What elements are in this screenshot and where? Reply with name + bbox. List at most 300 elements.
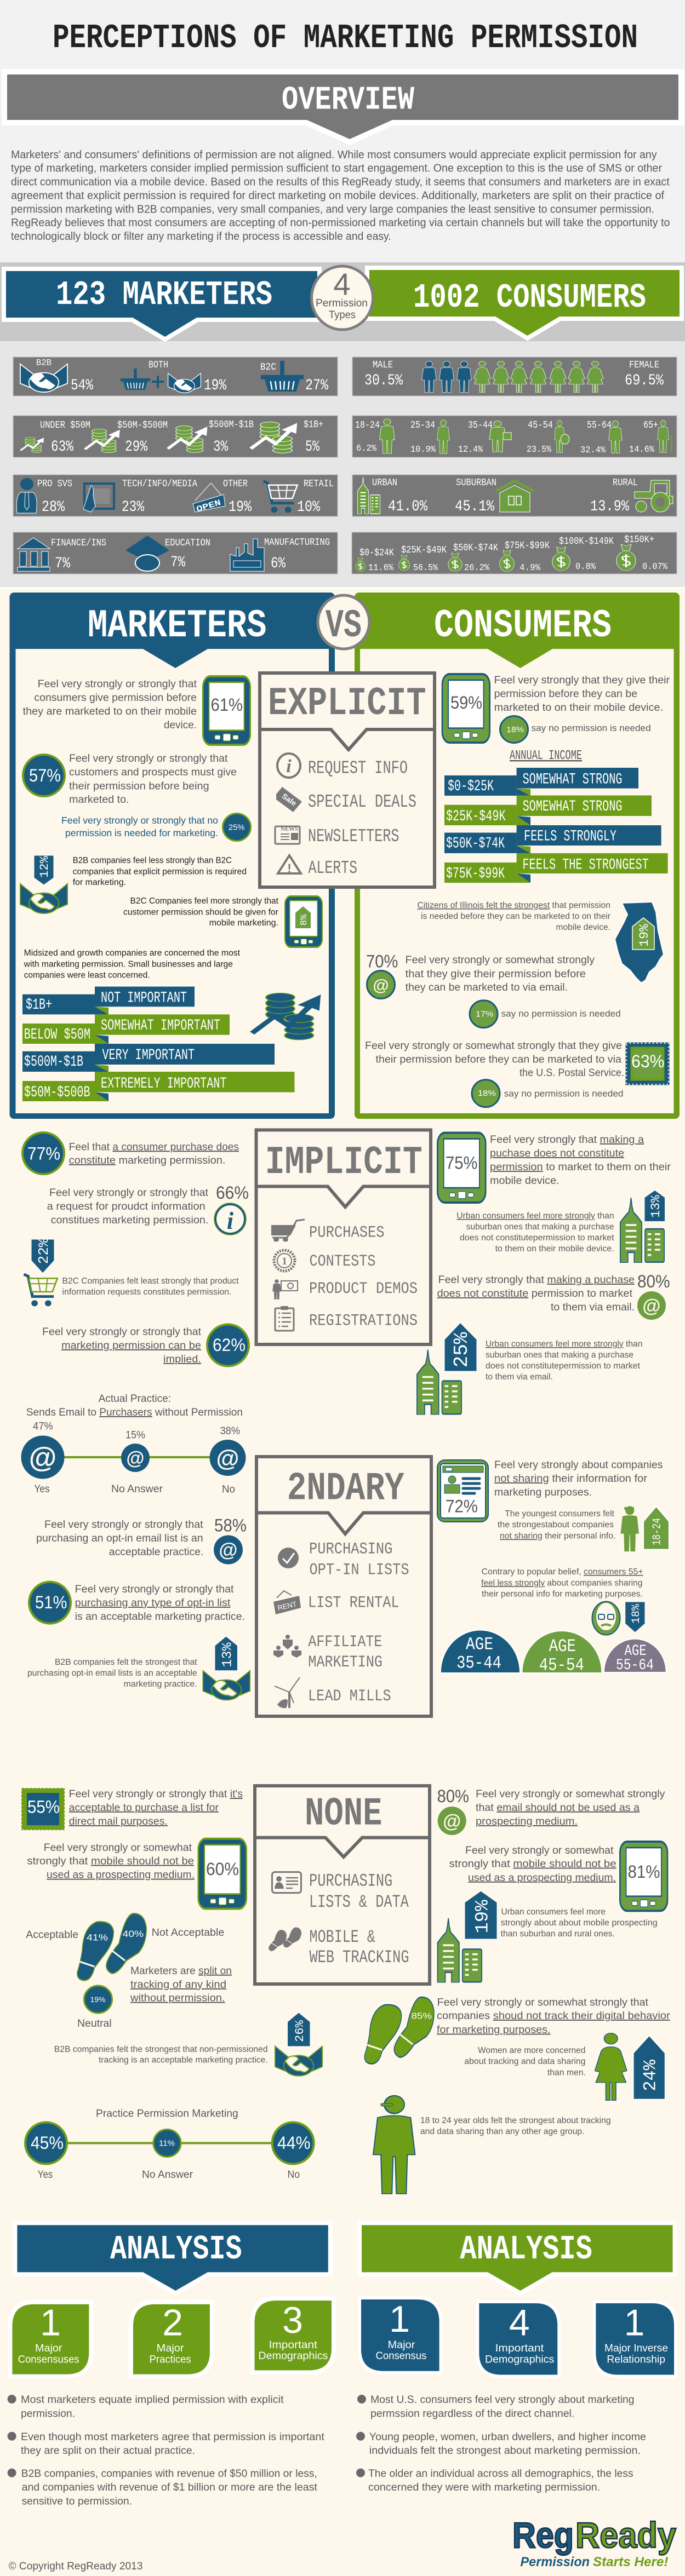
icon: postage stamp 55%: 55%: [27, 1797, 60, 1817]
marketers explicit: B2C note: mobile marketing.: [209, 918, 278, 928]
marketers implicit: B2C note: B2C Companies felt least strongly that product: [62, 1277, 239, 1286]
panel: explicit permission: [260, 673, 435, 887]
marketers none: split note: tracking of any kind: [130, 1979, 226, 1991]
stat: 57%: 57%: [29, 766, 61, 785]
stat: no answer 15%: 15%: [125, 1429, 145, 1441]
stat: yes 47%: @: [29, 1442, 56, 1474]
consumers none: tracking text: for marketing purposes.: [437, 2025, 550, 2036]
consumers implicit: mobile purchase text: mobile device.: [490, 1175, 560, 1187]
marketers implicit: product info text: constitues marketing permission.: [51, 1215, 208, 1226]
marketers explicit: mobile permission text: device.: [164, 720, 197, 731]
stat: age 18-24: [355, 419, 395, 454]
consumers none: mobile prospecting text: Feel very strongly or somewhat: [465, 1845, 614, 1856]
ribbon: below $50M somewhat important: BELOW $50M: [24, 1026, 90, 1044]
stat: education 7%: 7%: [170, 554, 185, 571]
marketers explicit: B2B note: companies that explicit permission is required: [73, 867, 247, 876]
marketers none: direct mail text: Feel very strongly or strongly that it's: [69, 1789, 243, 1800]
logo: RegReady: Permission: [521, 2555, 590, 2569]
marketers none: mobile prospecting text: [27, 1842, 195, 1881]
consumers explicit: Illinois note: mobile device.: [556, 923, 610, 932]
card: 1 major consensus: Consensus: [376, 2350, 426, 2362]
stat: no answer 11%: 11%: [159, 2139, 175, 2148]
stat: $150K+ 0.07%: [616, 534, 668, 572]
item: purchasing lists and data: LISTS & DATA: [309, 1892, 409, 1912]
marketers explicit: customers text: Feel very strongly or strongly that: [69, 753, 228, 764]
consumers 2ndary: not sharing text: marketing purposes.: [494, 1487, 592, 1498]
ribbon: $0-$25K somewhat strong: SOMEWHAT STRONG: [523, 771, 623, 789]
consumers implicit: mobile purchase text: puchase does not constitute: [490, 1148, 624, 1159]
chart: practice permission marketing: Practice Permission Marketing: [96, 2108, 238, 2120]
stat: $500M-$1B 3%: $500M-$1B: [209, 419, 254, 430]
ribbon: $0-$25K somewhat strong: $0-$25K: [448, 778, 494, 795]
stat: 51%: 51%: [35, 1592, 67, 1612]
marketers none: split note: without permission.: [130, 1993, 225, 2004]
badge: 4 permission types: 4: [333, 267, 351, 301]
consumers none: women note: about tracking and data sharing: [464, 2057, 585, 2066]
marketers 2ndary: any opt-in text: Feel very strongly or strongly that: [75, 1584, 234, 1595]
logo: RegReady: Starts Here!: [593, 2555, 669, 2569]
card: 1 major consensuses: Consensuses: [18, 2354, 79, 2366]
card: 1 major consensus: 1: [389, 2298, 410, 2340]
icon: phone 75%: [437, 1132, 486, 1203]
stat: retail 10%: [264, 479, 334, 516]
marketers none: B2B note: [54, 2045, 268, 2065]
stat: no 38%: @: [216, 1445, 239, 1471]
icon: phone 59%: [442, 674, 490, 743]
card: 3 important demographics: [254, 2299, 332, 2370]
consumers none: women note: [464, 2046, 586, 2077]
analysis banner: marketers: ANALYSIS: [110, 2230, 242, 2269]
stat: suburban 45.1%: SUBURBAN: [456, 478, 496, 488]
item: contests: 1: [282, 1256, 287, 1267]
marketers implicit: purchase text: Feel that a consumer purchase does: [69, 1141, 239, 1153]
item: purchasing lists and data: PURCHASING: [309, 1871, 392, 1891]
panel: implicit permission: [256, 1130, 431, 1344]
icon: older face with 18% tag: 18%: [630, 1603, 643, 1624]
consumers implicit: mobile purchase text: permission to market to them on their: [490, 1162, 671, 1173]
marketers none: B2B note: B2B companies felt the strongest that non-permissioned: [54, 2045, 268, 2054]
ribbon: $1B+ not important: $1B+: [26, 997, 52, 1014]
marketers implicit: product info text: Feel very strongly or strongly that: [49, 1187, 209, 1199]
ribbon: $50M-$500B extremely important: $50M-$500B: [24, 1084, 90, 1101]
heading: implicit: IMPLICIT: [265, 1140, 423, 1185]
chart: tracking footprints: 19%: [90, 1995, 105, 2004]
marketers none: split note: Marketers are split on: [130, 1965, 232, 1977]
stat: 57%: [23, 755, 65, 796]
consumers implicit: email purchase text: [437, 1274, 635, 1313]
stat: rural 13.9%: RURAL: [613, 478, 638, 488]
icon: handshake with 13% tag: 13%: [220, 1642, 236, 1668]
card: 2 major practices: Practices: [150, 2354, 191, 2366]
marketers 2ndary: opt-in email text: [36, 1519, 203, 1558]
item: alerts: ALERTS: [308, 858, 357, 878]
chart: actual practice, email to purchasers: Sends Email to Purchasers without Permission: [26, 1407, 243, 1418]
marketers none: direct mail text: acceptable to purchase a list for: [69, 1802, 219, 1814]
overview text: [11, 148, 670, 243]
stat: age 45-54: 23.5%: [527, 445, 552, 455]
item: affiliate marketing: AFFILIATE: [308, 1633, 382, 1652]
overview text: agreement that explicit permission is required for direct marketing on mobile devices. Additionally, marketers are split on their practice of: [11, 189, 664, 202]
analysis list: marketers: [8, 2394, 325, 2508]
marketers implicit: product info text: a request for proudct information: [47, 1201, 206, 1212]
stat: age 45-54: 45-54: [528, 420, 553, 431]
stat: 17% say no permission needed: [470, 1001, 621, 1028]
heading: 2ndary: 2NDARY: [287, 1467, 404, 1511]
icon: phone with 8% tag: 8%: [299, 914, 310, 925]
item: lead mills: [275, 1677, 391, 1708]
item: purchases: PURCHASES: [309, 1223, 385, 1242]
item: list rental: LIST RENTAL: [308, 1594, 399, 1613]
stat: rural 13.9%: [590, 478, 673, 515]
stat: finance 7%: FINANCE/INS: [51, 538, 106, 549]
analysis list: marketers: B2B companies, companies with revenue of $50 million or less,: [21, 2468, 317, 2480]
stat: both 19%: 19%: [204, 377, 226, 394]
marketers explicit: company size note: [24, 948, 241, 980]
marketers implicit: B2C note: information requests constitutes permission.: [62, 1287, 231, 1297]
stat: suburban 45.1%: 45.1%: [455, 498, 494, 515]
badge: 4 permission types: Permission: [316, 298, 368, 309]
panel: annual income: [352, 532, 677, 574]
chart: tracking footprints: Acceptable: [26, 1929, 78, 1941]
ribbon: $75K-$99K feels the strongest: [444, 853, 668, 883]
consumers implicit: urban email note: does not constitutepermission to market: [486, 1361, 641, 1371]
consumers explicit: Illinois note: [417, 901, 610, 932]
stat: male 30.5%: 30.5%: [364, 372, 403, 389]
stat: age 25-34: 10.9%: [410, 445, 436, 455]
stat: age 18-24: 18-24: [355, 420, 380, 431]
stat: $25K-$49K 56.5%: $25K-$49K: [401, 545, 447, 556]
marketers 2ndary: B2B note: B2B companies felt the strongest that: [55, 1658, 197, 1667]
stat: finance 7%: [18, 538, 106, 572]
stat: age 65+: 65+: [643, 420, 658, 431]
marketers implicit: implied text: Feel very strongly or strongly that: [42, 1326, 202, 1338]
stat: age 35-44: 35-44: [468, 420, 493, 431]
stat: 62%: [207, 1324, 249, 1366]
consumers 2ndary: 55+ note: Contrary to popular belief, consumers 55+: [482, 1567, 643, 1577]
item: purchasing lists and data: [272, 1871, 409, 1912]
marketers 2ndary: opt-in email text: acceptable practice.: [109, 1546, 203, 1558]
consumers explicit: postal text: the U.S. Postal Service.: [520, 1067, 624, 1079]
ribbon: $25K-$49K somewhat strong: $25K-$49K: [446, 808, 506, 825]
panel: urban / suburban / rural: [352, 475, 677, 516]
consumers 2ndary: youngest note: not sharing their personal info.: [500, 1532, 615, 1541]
ribbon: below $50M somewhat important: SOMEWHAT IMPORTANT: [101, 1017, 220, 1034]
overview text: Marketers' and consumers' definitions of permission are not aligned. While most consumers would appreciate explicit permission for any: [11, 148, 657, 161]
icon: profile card 72%: 72%: [446, 1496, 478, 1516]
stat: 70% email: @: [373, 976, 389, 994]
consumers explicit: Illinois note: Citizens of Illinois felt the strongest that permission: [417, 901, 610, 910]
stat: B2C 27%: [260, 361, 328, 394]
marketers explicit: B2C note: [123, 896, 279, 928]
stat: 80% email: [637, 1272, 670, 1320]
item: mobile and web tracking: [269, 1927, 409, 1968]
card: 1 major inverse relationship: Relationship: [607, 2354, 665, 2366]
consumers explicit: mobile text: permission before they can be: [494, 688, 637, 700]
item: lead mills: LEAD MILLS: [308, 1687, 391, 1706]
consumers none: women note: than men.: [547, 2068, 586, 2077]
stat: suburban 45.1%: [455, 478, 535, 515]
ribbon: $75K-$99K feels the strongest: $75K-$99K: [446, 866, 505, 883]
item: request info: REQUEST INFO: [308, 758, 408, 779]
badge: VS: [318, 595, 369, 649]
heading: consumers: CONSUMERS: [434, 603, 612, 648]
stat: no 44%: [272, 2123, 314, 2181]
stat: professional services 28%: 28%: [42, 499, 65, 516]
consumers none: email prospecting text: Feel very strongly or somewhat strongly: [476, 1789, 665, 1800]
ribbon: $50K-$74K feels strongly: $50K-$74K: [446, 836, 505, 852]
stat: retail 10%: RETAIL: [304, 479, 334, 490]
stat: $75K-$99K 4.9%: 4.9%: [520, 563, 541, 573]
chart: tracking footprints: [26, 1913, 224, 2029]
marketers none: mobile prospecting text: strongly that mobile should not be: [27, 1855, 194, 1867]
stat: age 45-54: [527, 420, 569, 455]
analysis list: consumers: concerned they were with marketing permission.: [368, 2482, 600, 2493]
stat: 80% email: 80%: [637, 1272, 670, 1291]
stat: 66% info: i: [227, 1208, 234, 1234]
card: 1 major consensuses: Major: [35, 2343, 62, 2354]
analysis banner: consumers: ANALYSIS: [460, 2230, 592, 2269]
icon: city with 13% tag: [620, 1191, 665, 1263]
logo: RegReady: [512, 2515, 676, 2569]
consumers explicit: postal text: Feel very strongly or somewhat strongly that they give: [365, 1040, 622, 1051]
chart: tracking footprints: 41%: [87, 1933, 108, 1943]
heading: marketers: MARKETERS: [88, 603, 266, 648]
consumers none: urban note: than suburban and rural ones.: [501, 1929, 615, 1939]
ribbon: $50K-$74K feels strongly: FEELS STRONGLY: [524, 829, 616, 846]
icon: postage stamp 63%: 63%: [631, 1051, 665, 1071]
stat: female 69.5%: 69.5%: [625, 372, 664, 389]
icon: handshake with 26% tag: 26%: [293, 2020, 307, 2042]
stat: age 55-64: [580, 420, 622, 456]
item: product demos: [272, 1279, 418, 1300]
stat: 58% email: 58%: [214, 1515, 247, 1535]
consumers explicit: mobile text: [494, 675, 670, 714]
stat: B2C 27%: 27%: [305, 377, 328, 394]
ribbon: $25K-$49K somewhat strong: SOMEWHAT STRONG: [523, 798, 623, 815]
item: alerts: !: [287, 861, 292, 875]
icon: profile card 72%: [437, 1460, 488, 1522]
stat: no answer 11%: No Answer: [142, 2169, 193, 2181]
heading: explicit: EXPLICIT: [268, 681, 426, 726]
marketers 2ndary: any opt-in text: [75, 1584, 245, 1623]
panel: marketers column: [10, 593, 335, 1119]
stat: $1B+ 5%: [249, 419, 323, 456]
stat: tech/info/media 23%: [83, 479, 197, 516]
analysis list: consumers: Young people, women, urban dwellers, and higher income: [369, 2431, 646, 2443]
item: mobile and web tracking: MOBILE &: [309, 1927, 375, 1947]
logo: RegReady: Ready: [575, 2515, 676, 2555]
stat: yes 47%: Yes: [34, 1484, 50, 1495]
icon: postage stamp 63%: [626, 1043, 669, 1084]
icon: phone 60%: [198, 1839, 247, 1909]
marketers explicit: mobile permission text: Feel very strongly or strongly that: [38, 679, 197, 690]
consumers implicit: mobile purchase text: [490, 1134, 671, 1187]
consumers none: email prospecting text: that email should not be used as a: [476, 1802, 640, 1814]
marketers implicit: purchase text: constitute marketing permission.: [69, 1155, 225, 1166]
icon: city with 19% tag: 19%: [472, 1900, 493, 1934]
stat: B2B 54%: 54%: [71, 377, 93, 394]
icon: footprints 85%: 85%: [412, 2012, 432, 2021]
analysis list: consumers: permssion regardless of the direct channel.: [370, 2408, 574, 2420]
consumers explicit: email text: they can be marketed to via email.: [406, 982, 568, 993]
chart: tracking footprints: Neutral: [77, 2018, 112, 2029]
stat: $0-$24K 11.6%: [355, 548, 394, 573]
analysis banner: consumers: [362, 2225, 673, 2291]
stat: 66% info: 66%: [216, 1183, 249, 1203]
icon: woman with 24% tag: 24%: [641, 2059, 661, 2091]
marketers explicit: B2C note: customer permission should be given for: [123, 908, 278, 917]
card: 4 important demographics: Important: [495, 2343, 544, 2354]
consumers implicit: urban email note: [486, 1339, 642, 1382]
dome: age 35-44: AGE: [466, 1634, 493, 1654]
stat: $100K-$149K 0.8%: $100K-$149K: [559, 536, 614, 547]
copyright: © Copyright RegReady 2013: [9, 2561, 142, 2572]
consumers 2ndary: not sharing text: [494, 1459, 663, 1498]
stat: no 38%: [209, 1425, 246, 1496]
stat: no 44%: No: [287, 2169, 300, 2181]
item: request info: i: [286, 756, 292, 777]
item: list rental: [273, 1591, 399, 1614]
stat: rural 13.9%: 13.9%: [590, 498, 629, 515]
dome: age 55-64: 55-64: [616, 1657, 654, 1674]
stat: manufacturing 6%: [230, 537, 330, 572]
stat: 17% say no permission needed: 17%: [476, 1010, 493, 1019]
consumers implicit: email purchase text: to them via email.: [551, 1302, 635, 1313]
item: mobile and web tracking: WEB TRACKING: [309, 1947, 409, 1968]
card: 1 major inverse relationship: [596, 2302, 674, 2374]
analysis list: marketers: they are split on their actual practice.: [21, 2445, 195, 2457]
chart: importance by revenue ribbons: [22, 987, 295, 1101]
item: purchasing opt-in lists: [278, 1540, 409, 1580]
icon: phone 61%: 61%: [210, 695, 243, 715]
icon: woman with 24% tag: [595, 2033, 665, 2100]
stat: age 25-34: [410, 420, 449, 455]
stat: 58% email: [214, 1515, 247, 1564]
stat: no answer 11%: [142, 2129, 193, 2181]
stat: 18% say no permission needed: say no permission is needed: [532, 723, 651, 733]
marketers 2ndary: opt-in email text: purchasing an opt-in email list is an: [36, 1533, 203, 1544]
icon: older face with 18% tag: [592, 1601, 645, 1635]
stat: age 18-24: 6.2%: [356, 444, 377, 454]
stat: $50M-$500M 29%: $50M-$500M: [117, 420, 168, 431]
icon: Illinois map with 19% tag: 19%: [637, 924, 652, 947]
stat: $500M-$1B 3%: [167, 419, 254, 456]
icon: handshake with 12% tag: 12%: [38, 855, 52, 878]
stat: 80% email: @: [642, 1296, 661, 1316]
stat: urban 41.0%: [357, 477, 427, 515]
stat: no answer 15%: [111, 1429, 163, 1495]
marketers none: direct mail text: direct mail purposes.: [69, 1816, 168, 1827]
icon: phone with 8% tag: [285, 896, 322, 947]
consumers implicit: urban email note: suburban ones that making a purchase: [486, 1350, 633, 1360]
ribbon: $0-$25K somewhat strong: [444, 768, 638, 796]
stat: female 69.5%: [625, 360, 664, 389]
card: 3 important demographics: Important: [269, 2339, 318, 2351]
card: 4 important demographics: 4: [509, 2302, 530, 2344]
item: purchasing opt-in lists: OPT-IN LISTS: [309, 1561, 409, 1580]
stat: no 38%: 38%: [220, 1425, 240, 1437]
stat: other 19%: 19%: [229, 499, 252, 516]
stat: tech/info/media 23%: TECH/INFO/MEDIA: [122, 479, 197, 490]
consumers explicit: Illinois note: is needed before they can be marketed to on their: [421, 912, 610, 921]
marketers explicit: customers text: marketed to.: [69, 794, 129, 806]
stat: tech/info/media 23%: 23%: [122, 499, 144, 516]
icon: young person with 18-24 tag: 18-24: [651, 1518, 664, 1545]
icon: phone 60%: 60%: [206, 1859, 239, 1879]
stat: $150K+ 0.07%: 0.07%: [642, 562, 668, 572]
stat: age 55-64: 32.4%: [580, 445, 606, 456]
stat: $50M-$500M 29%: 29%: [125, 439, 147, 456]
callout: no permission needed 25%: [61, 814, 251, 841]
icon: Illinois map with 19% tag: [615, 902, 664, 983]
icon: city with 25% tag: [417, 1323, 477, 1415]
analysis list: marketers: Even though most marketers agree that permission is important: [21, 2431, 325, 2443]
analysis list: marketers: and companies with revenue of $1 billion or more are the least: [22, 2482, 318, 2493]
panel: industries: [13, 475, 338, 516]
overview banner: [7, 74, 678, 139]
panel: gender split: [352, 357, 677, 396]
stat: other 19%: [193, 479, 252, 516]
marketers explicit: B2B note: for marketing.: [73, 878, 126, 887]
icon: handshake with 12% tag: [20, 855, 67, 913]
stat: age 65+: 14.6%: [629, 445, 655, 455]
stat: B2B 54%: B2B: [36, 358, 52, 368]
analysis banner: marketers: [17, 2225, 328, 2291]
consumers explicit: postal text: [365, 1040, 624, 1079]
stat: $25K-$49K 56.5%: 56.5%: [413, 563, 438, 573]
consumers none: urban note: [501, 1907, 658, 1939]
stat: 70% email: [366, 952, 398, 999]
marketers explicit: company size note: with marketing permission. Small businesses and large: [24, 959, 233, 969]
ribbon: $500M-$1B very important: [22, 1044, 275, 1072]
stat: yes 47%: 47%: [33, 1421, 53, 1433]
stat: $500M-$1B 3%: 3%: [213, 439, 228, 456]
stat: both 19%: [121, 360, 226, 394]
consumers implicit: urban mobile note: [456, 1211, 614, 1254]
stat: $100K-$149K 0.8%: [552, 536, 614, 572]
stat: finance 7%: 7%: [55, 555, 70, 572]
marketers explicit: customers text: customers and prospects must give: [69, 767, 237, 778]
consumers explicit: postal text: their permission before they can be marketed to via: [376, 1054, 621, 1066]
dome: age 35-44: [441, 1630, 520, 1673]
chart: age domes: [441, 1630, 666, 1676]
dome: age 55-64: AGE: [625, 1643, 647, 1660]
marketers none: mobile prospecting text: Feel very strongly or somewhat: [44, 1842, 192, 1854]
icon: cart with 22% tag: 22%: [36, 1238, 52, 1264]
stat: B2B 54%: [20, 358, 93, 394]
marketers explicit: customers text: [69, 753, 237, 806]
item: special deals: SPECIAL DEALS: [308, 792, 416, 812]
consumers none: women note: Women are more concerned: [478, 2046, 585, 2055]
consumers none: 18 to 24 note: and data sharing than any other age group.: [420, 2127, 584, 2136]
stat: $75K-$99K 4.9%: $75K-$99K: [505, 540, 550, 551]
consumers none: tracking text: Feel very strongly or somewhat strongly that: [437, 1997, 649, 2009]
heading: annual income: ANNUAL INCOME: [510, 749, 582, 763]
dome: age 35-44: 35-44: [456, 1653, 501, 1673]
chart: actual practice, email to purchasers: Actual Practice:: [99, 1393, 171, 1405]
item: special deals: Sale: [281, 791, 299, 808]
marketers none: direct mail text: [69, 1789, 243, 1827]
item: purchasing opt-in lists: PURCHASING: [309, 1540, 392, 1559]
stat: yes 45%: Yes: [38, 2169, 53, 2181]
chart: tracking footprints: Not Acceptable: [152, 1927, 224, 1939]
heading: none: NONE: [305, 1792, 383, 1837]
marketers implicit: product info text: [47, 1187, 209, 1226]
item: contests: CONTESTS: [309, 1252, 376, 1271]
panel: no permission: [255, 1786, 430, 1984]
stat: 77%: 77%: [27, 1143, 60, 1163]
card: 1 major consensuses: 1: [40, 2302, 61, 2344]
